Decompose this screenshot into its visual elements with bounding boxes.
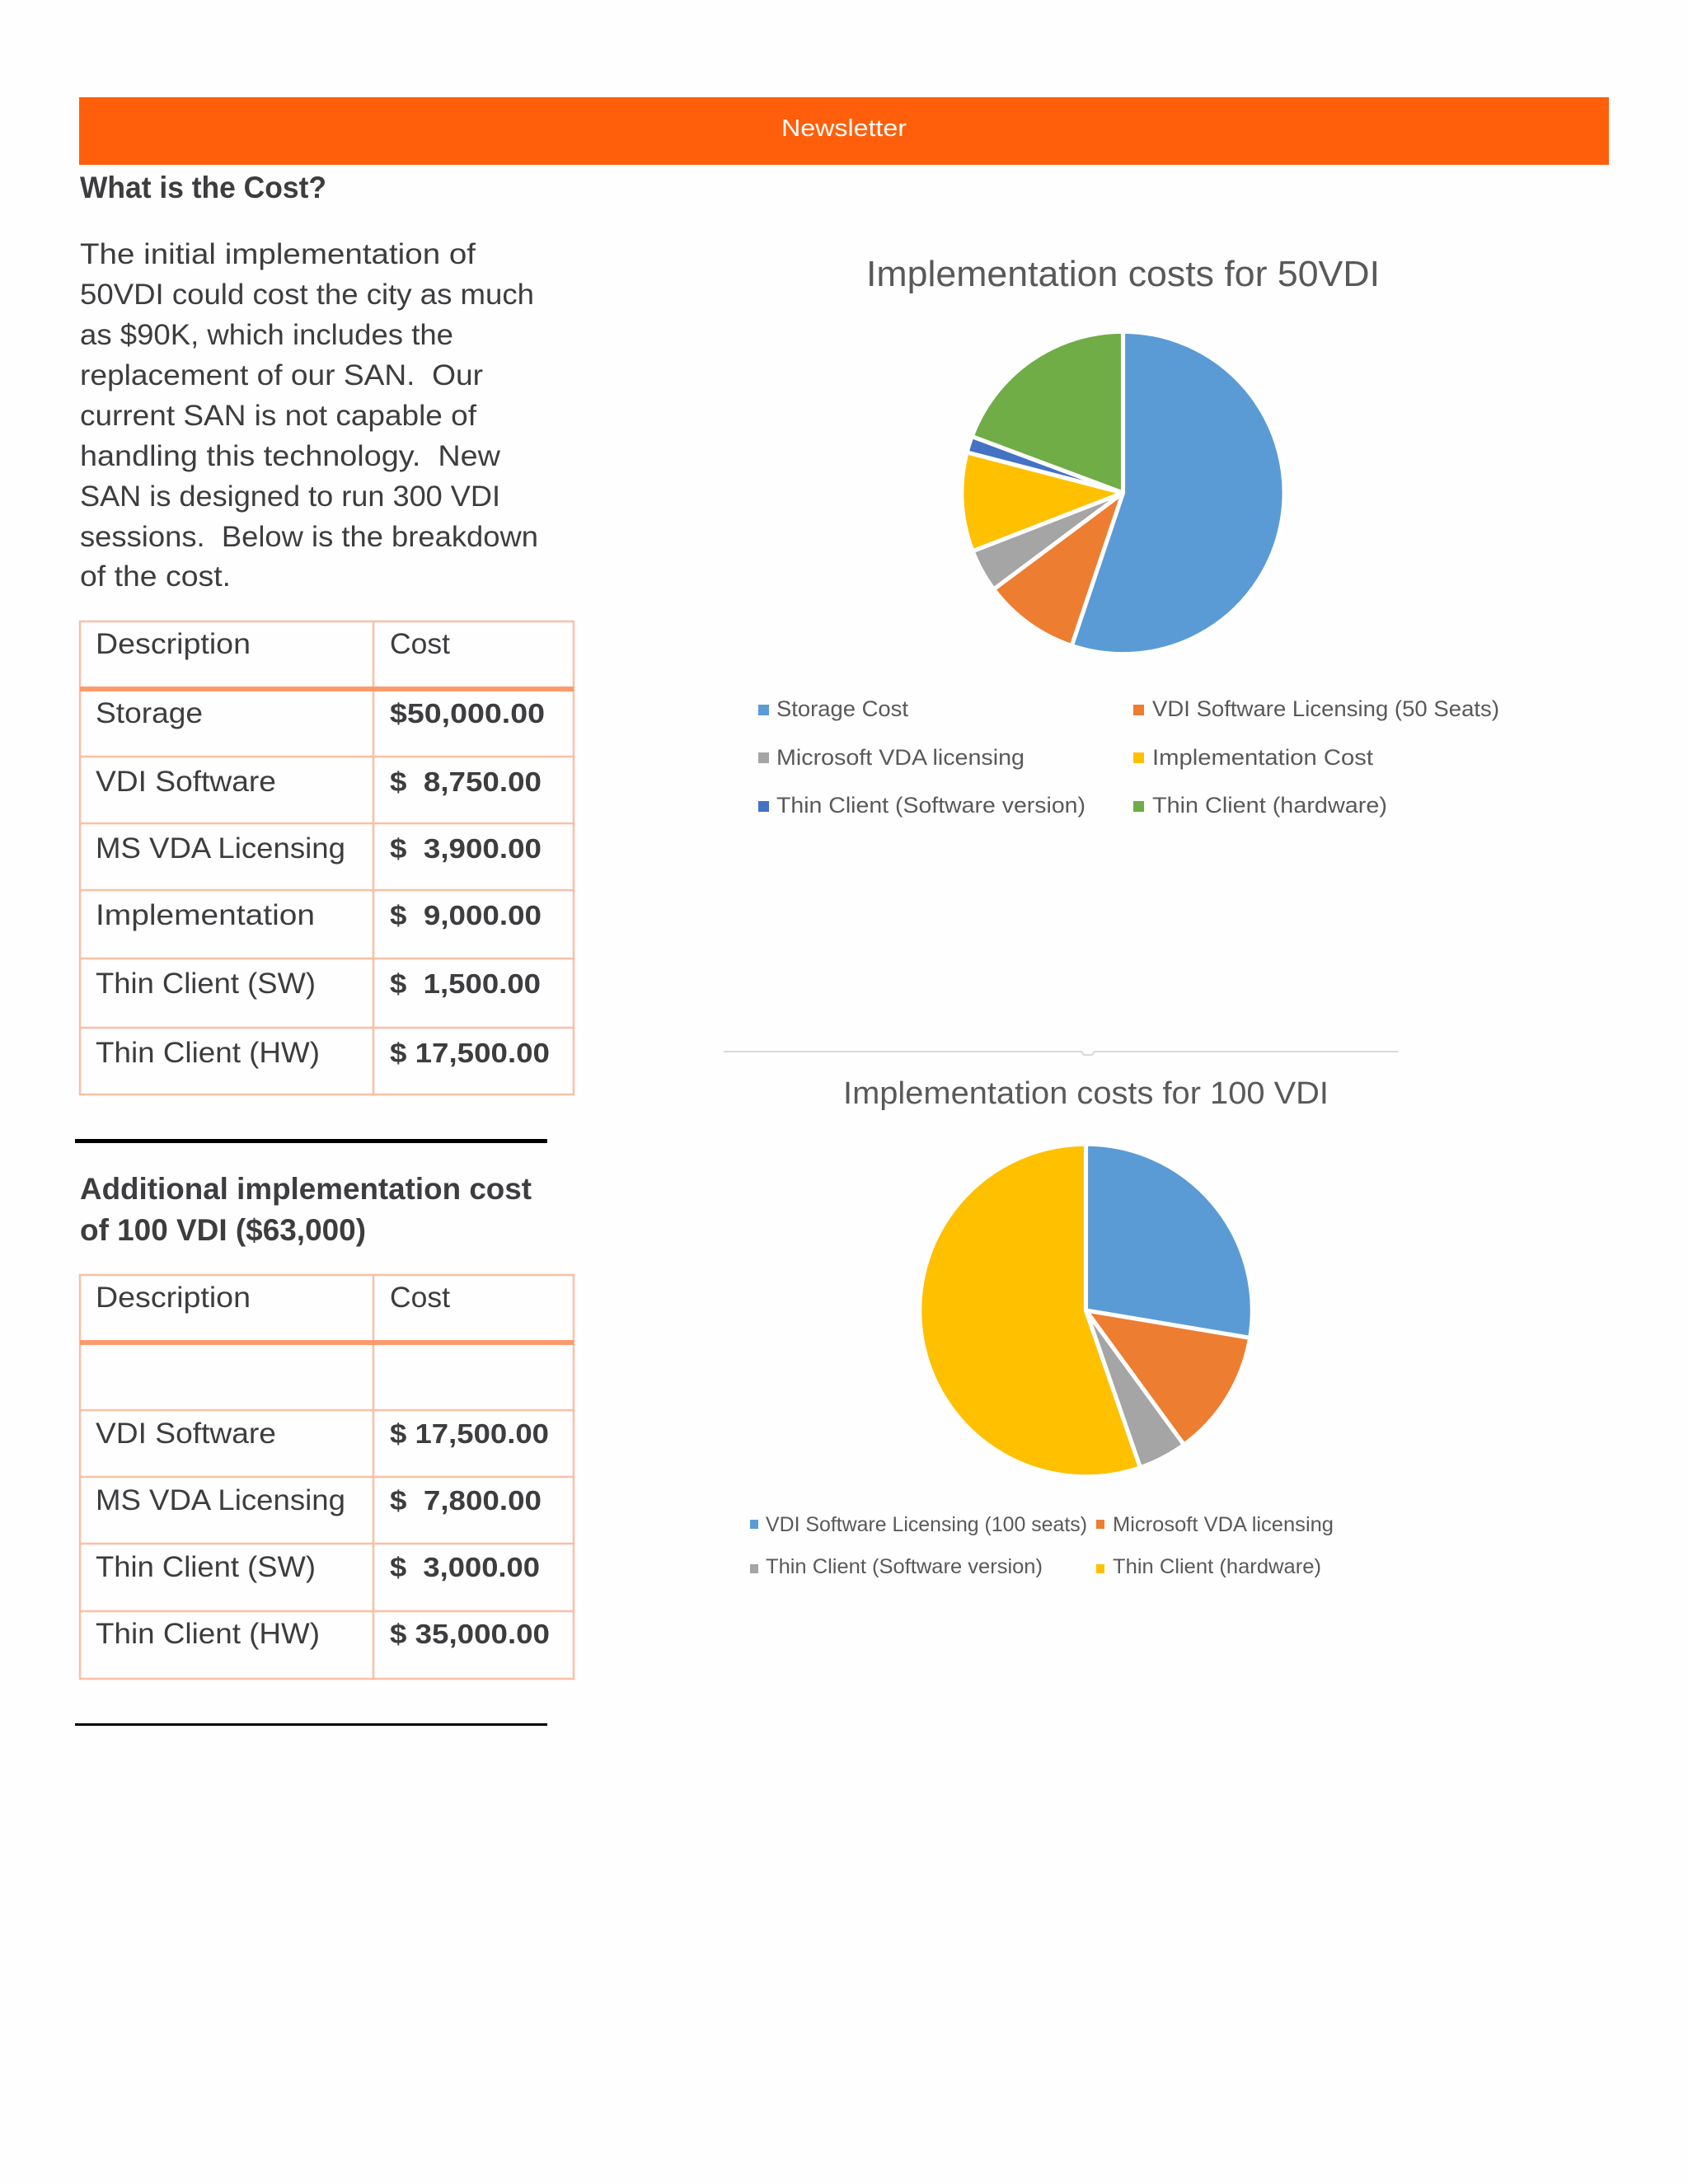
intro paragraph (80, 238, 538, 593)
chart title: 50 VDI: Implementation costs for 50VDI (866, 254, 1380, 294)
heading: additional implementation cost: Additional implementation cost (80, 1172, 532, 1206)
table: 50 VDI cost breakdown: Thin Client (SW) (96, 968, 316, 1000)
intro paragraph: current SAN is not capable of (80, 400, 476, 432)
legend: 100 VDI: Thin Client (hardware) (1113, 1555, 1321, 1578)
legend: 50 VDI: Implementation Cost (1152, 745, 1374, 770)
table: 100 VDI additional cost: $ 35,000.00 (390, 1619, 550, 1649)
table: 100 VDI additional cost: $ 17,500.00 (390, 1418, 549, 1449)
banner (79, 97, 1609, 165)
table: 100 VDI additional cost: $ 3,000.00 (390, 1552, 540, 1582)
table: 50 VDI cost breakdown: VDI Software (96, 766, 276, 798)
table: 50 VDI cost breakdown: Storage (96, 697, 203, 729)
legend: 100 VDI: Microsoft VDA licensing (1113, 1513, 1334, 1536)
table: 100 VDI additional cost: MS VDA Licensing (96, 1484, 345, 1516)
table: 50 VDI cost breakdown (80, 621, 574, 1094)
heading: what is the cost: What is the Cost? (80, 171, 326, 204)
table: 50 VDI cost breakdown: $50,000.00 (390, 698, 545, 729)
table: 50 VDI cost breakdown: $ 3,900.00 (390, 833, 542, 864)
heading: additional implementation cost: of 100 VDI ($63,000) (80, 1213, 366, 1247)
legend: 100 VDI (750, 1513, 1334, 1578)
table: 100 VDI additional cost: Cost (390, 1282, 450, 1314)
table: 50 VDI cost breakdown: Description (96, 628, 251, 660)
table: 50 VDI cost breakdown: Cost (390, 628, 450, 660)
legend: 50 VDI (758, 696, 1499, 818)
table: 50 VDI cost breakdown: Thin Client (HW) (96, 1037, 320, 1069)
legend: 50 VDI: Storage Cost (776, 696, 908, 721)
pie chart: 100 VDI (920, 1144, 1252, 1477)
intro paragraph: The initial implementation of (80, 238, 476, 270)
heading: additional implementation cost (80, 1172, 532, 1247)
legend: 50 VDI: Microsoft VDA licensing (776, 745, 1025, 770)
intro paragraph: handling this technology. New (80, 440, 501, 472)
table: 50 VDI cost breakdown: Implementation (96, 899, 315, 931)
table: 100 VDI additional cost: Thin Client (SW) (96, 1551, 316, 1583)
chart title: 100 VDI: Implementation costs for 100 VDI (843, 1076, 1329, 1111)
table: 50 VDI cost breakdown: $ 9,000.00 (390, 900, 542, 930)
table: 100 VDI additional cost (80, 1275, 574, 1679)
intro paragraph: replacement of our SAN. Our (80, 359, 483, 391)
table: 100 VDI additional cost: VDI Software (96, 1418, 276, 1450)
table: 100 VDI additional cost: Thin Client (HW) (96, 1618, 320, 1650)
legend: 50 VDI: Thin Client (Software version) (776, 793, 1085, 818)
legend: 100 VDI: VDI Software Licensing (100 seats) (766, 1513, 1087, 1536)
intro paragraph: 50VDI could cost the city as much (80, 279, 534, 311)
table: 50 VDI cost breakdown: $ 17,500.00 (390, 1038, 550, 1068)
legend: 100 VDI: Thin Client (Software version) (766, 1555, 1043, 1578)
table: 100 VDI additional cost: $ 7,800.00 (390, 1485, 542, 1516)
table: 50 VDI cost breakdown: $ 1,500.00 (390, 968, 541, 999)
legend: 50 VDI: Thin Client (hardware) (1152, 793, 1387, 818)
intro paragraph: as $90K, which includes the (80, 319, 453, 351)
intro paragraph: sessions. Below is the breakdown (80, 521, 538, 553)
table: 100 VDI additional cost: Description (96, 1282, 251, 1314)
table: 50 VDI cost breakdown: $ 8,750.00 (390, 766, 542, 797)
banner: Newsletter (781, 115, 907, 142)
intro paragraph: of the cost. (80, 560, 231, 593)
pie chart: 50 VDI (962, 331, 1284, 654)
legend: 50 VDI: VDI Software Licensing (50 Seats) (1152, 696, 1499, 721)
intro paragraph: SAN is designed to run 300 VDI (80, 480, 500, 513)
table: 50 VDI cost breakdown: MS VDA Licensing (96, 832, 345, 865)
